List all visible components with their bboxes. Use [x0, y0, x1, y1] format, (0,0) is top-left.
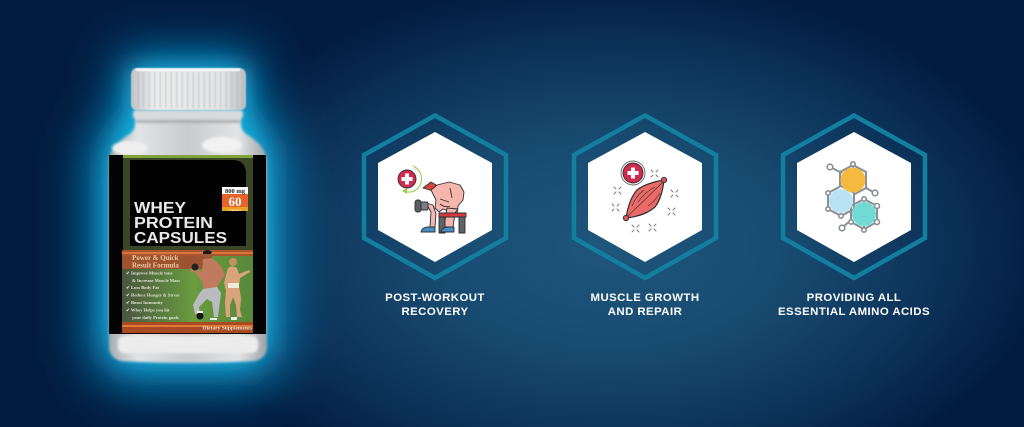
bottle glow — [90, 55, 286, 385]
hexagon frame — [783, 116, 925, 278]
feature 2: muscle growth and repair — [574, 116, 716, 318]
hexagon frame — [364, 116, 506, 278]
label lower panel: ✔ Improve Muscle tone — [126, 270, 173, 276]
caption: PROVIDING ALL — [807, 292, 901, 304]
icon: recovery and workout figure — [398, 166, 466, 233]
dosage badge: Capsules — [229, 208, 242, 212]
product name: WHEY — [134, 200, 187, 217]
bottle body — [109, 110, 267, 363]
product bottle — [109, 68, 930, 363]
dosage badge — [222, 187, 248, 212]
label lower panel: Result Formula — [132, 262, 179, 270]
icon: molecule — [826, 162, 880, 232]
fitness couple — [190, 250, 250, 320]
feature 1: post-workout recovery — [364, 116, 506, 318]
feature 3: essential amino acids — [778, 116, 930, 318]
caption — [778, 292, 930, 318]
bottle label — [109, 155, 266, 334]
label lower panel: Power & Quick — [132, 254, 179, 262]
dosage badge: 800 mg — [225, 188, 246, 195]
caption — [385, 292, 485, 318]
product name: CAPSULES — [134, 230, 227, 247]
label lower panel: ✔ Loss Body Fat — [126, 285, 160, 290]
caption: AND REPAIR — [608, 306, 682, 318]
label lower panel — [122, 250, 253, 333]
product name: PROTEIN — [134, 215, 213, 232]
label lower panel: ✔ Reduce Hunger & Stress — [126, 292, 180, 298]
label lower panel: & Increase Muscle Mass — [132, 278, 180, 283]
icon: muscle with plus badge — [621, 161, 667, 221]
bottle cap — [131, 68, 246, 110]
product name — [134, 200, 227, 247]
hexagon frame — [574, 116, 716, 278]
caption: MUSCLE GROWTH — [590, 292, 700, 304]
caption: ESSENTIAL AMINO ACIDS — [778, 306, 930, 318]
label lower panel: ✔ Boost Immunity — [126, 300, 163, 305]
dosage badge: 60 — [228, 194, 242, 209]
label lower panel: Dietary Supplements — [203, 326, 252, 332]
caption: RECOVERY — [401, 306, 469, 318]
label lower panel: your daily Protein goals — [132, 315, 179, 320]
icon: sparkle marks — [612, 170, 678, 232]
caption — [590, 292, 700, 318]
caption: POST-WORKOUT — [385, 292, 485, 304]
label lower panel: ✔ Whey Helps you hit — [126, 308, 170, 312]
